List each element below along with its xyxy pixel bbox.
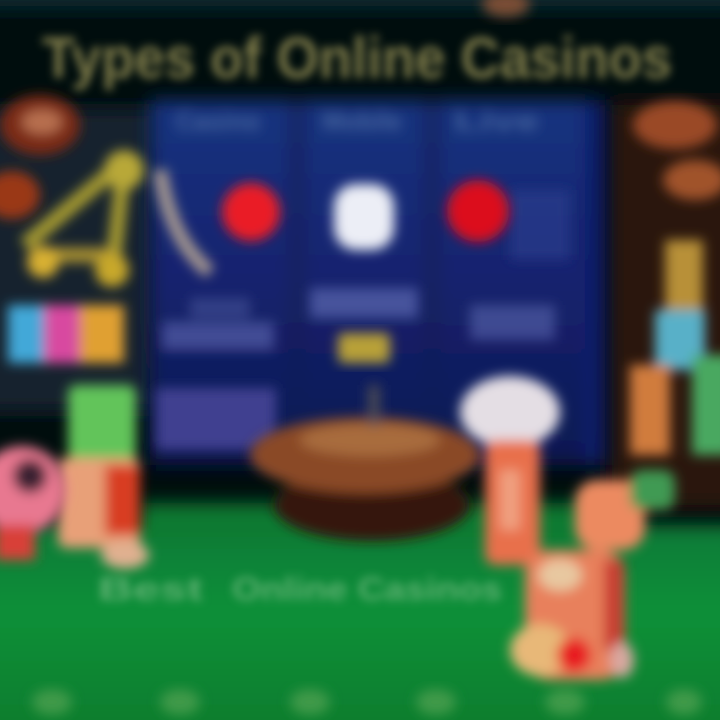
icon: red chip right (447, 180, 509, 242)
column dividers (291, 100, 303, 430)
title: Types of Online Casinos (42, 26, 672, 91)
column text blocks (156, 190, 570, 450)
left chip stack (58, 385, 149, 569)
right chip stack (460, 376, 675, 680)
left top ornaments (0, 95, 80, 219)
colour swatches (8, 305, 124, 363)
left decoration: gold emblem (25, 150, 144, 287)
column headings: Mobile (322, 106, 402, 136)
right decoration (630, 101, 720, 455)
decorative top ornament (482, 0, 530, 17)
column headings (176, 106, 540, 136)
column headings: Live (454, 106, 540, 136)
icon: gold badge (338, 333, 390, 363)
table text: Best (98, 571, 204, 607)
table bottom markers (32, 689, 702, 715)
table text: Online Casinos (232, 571, 502, 607)
column headings: Casino (176, 106, 260, 136)
panel: blue board with three columns (150, 100, 605, 465)
pink chip (0, 446, 66, 560)
icon: red chip left (222, 183, 280, 241)
icon: wand line (160, 170, 210, 272)
table text (98, 571, 502, 607)
table: green felt (0, 503, 720, 720)
roulette bowl (250, 385, 480, 541)
icon: white chip centre (334, 184, 394, 250)
